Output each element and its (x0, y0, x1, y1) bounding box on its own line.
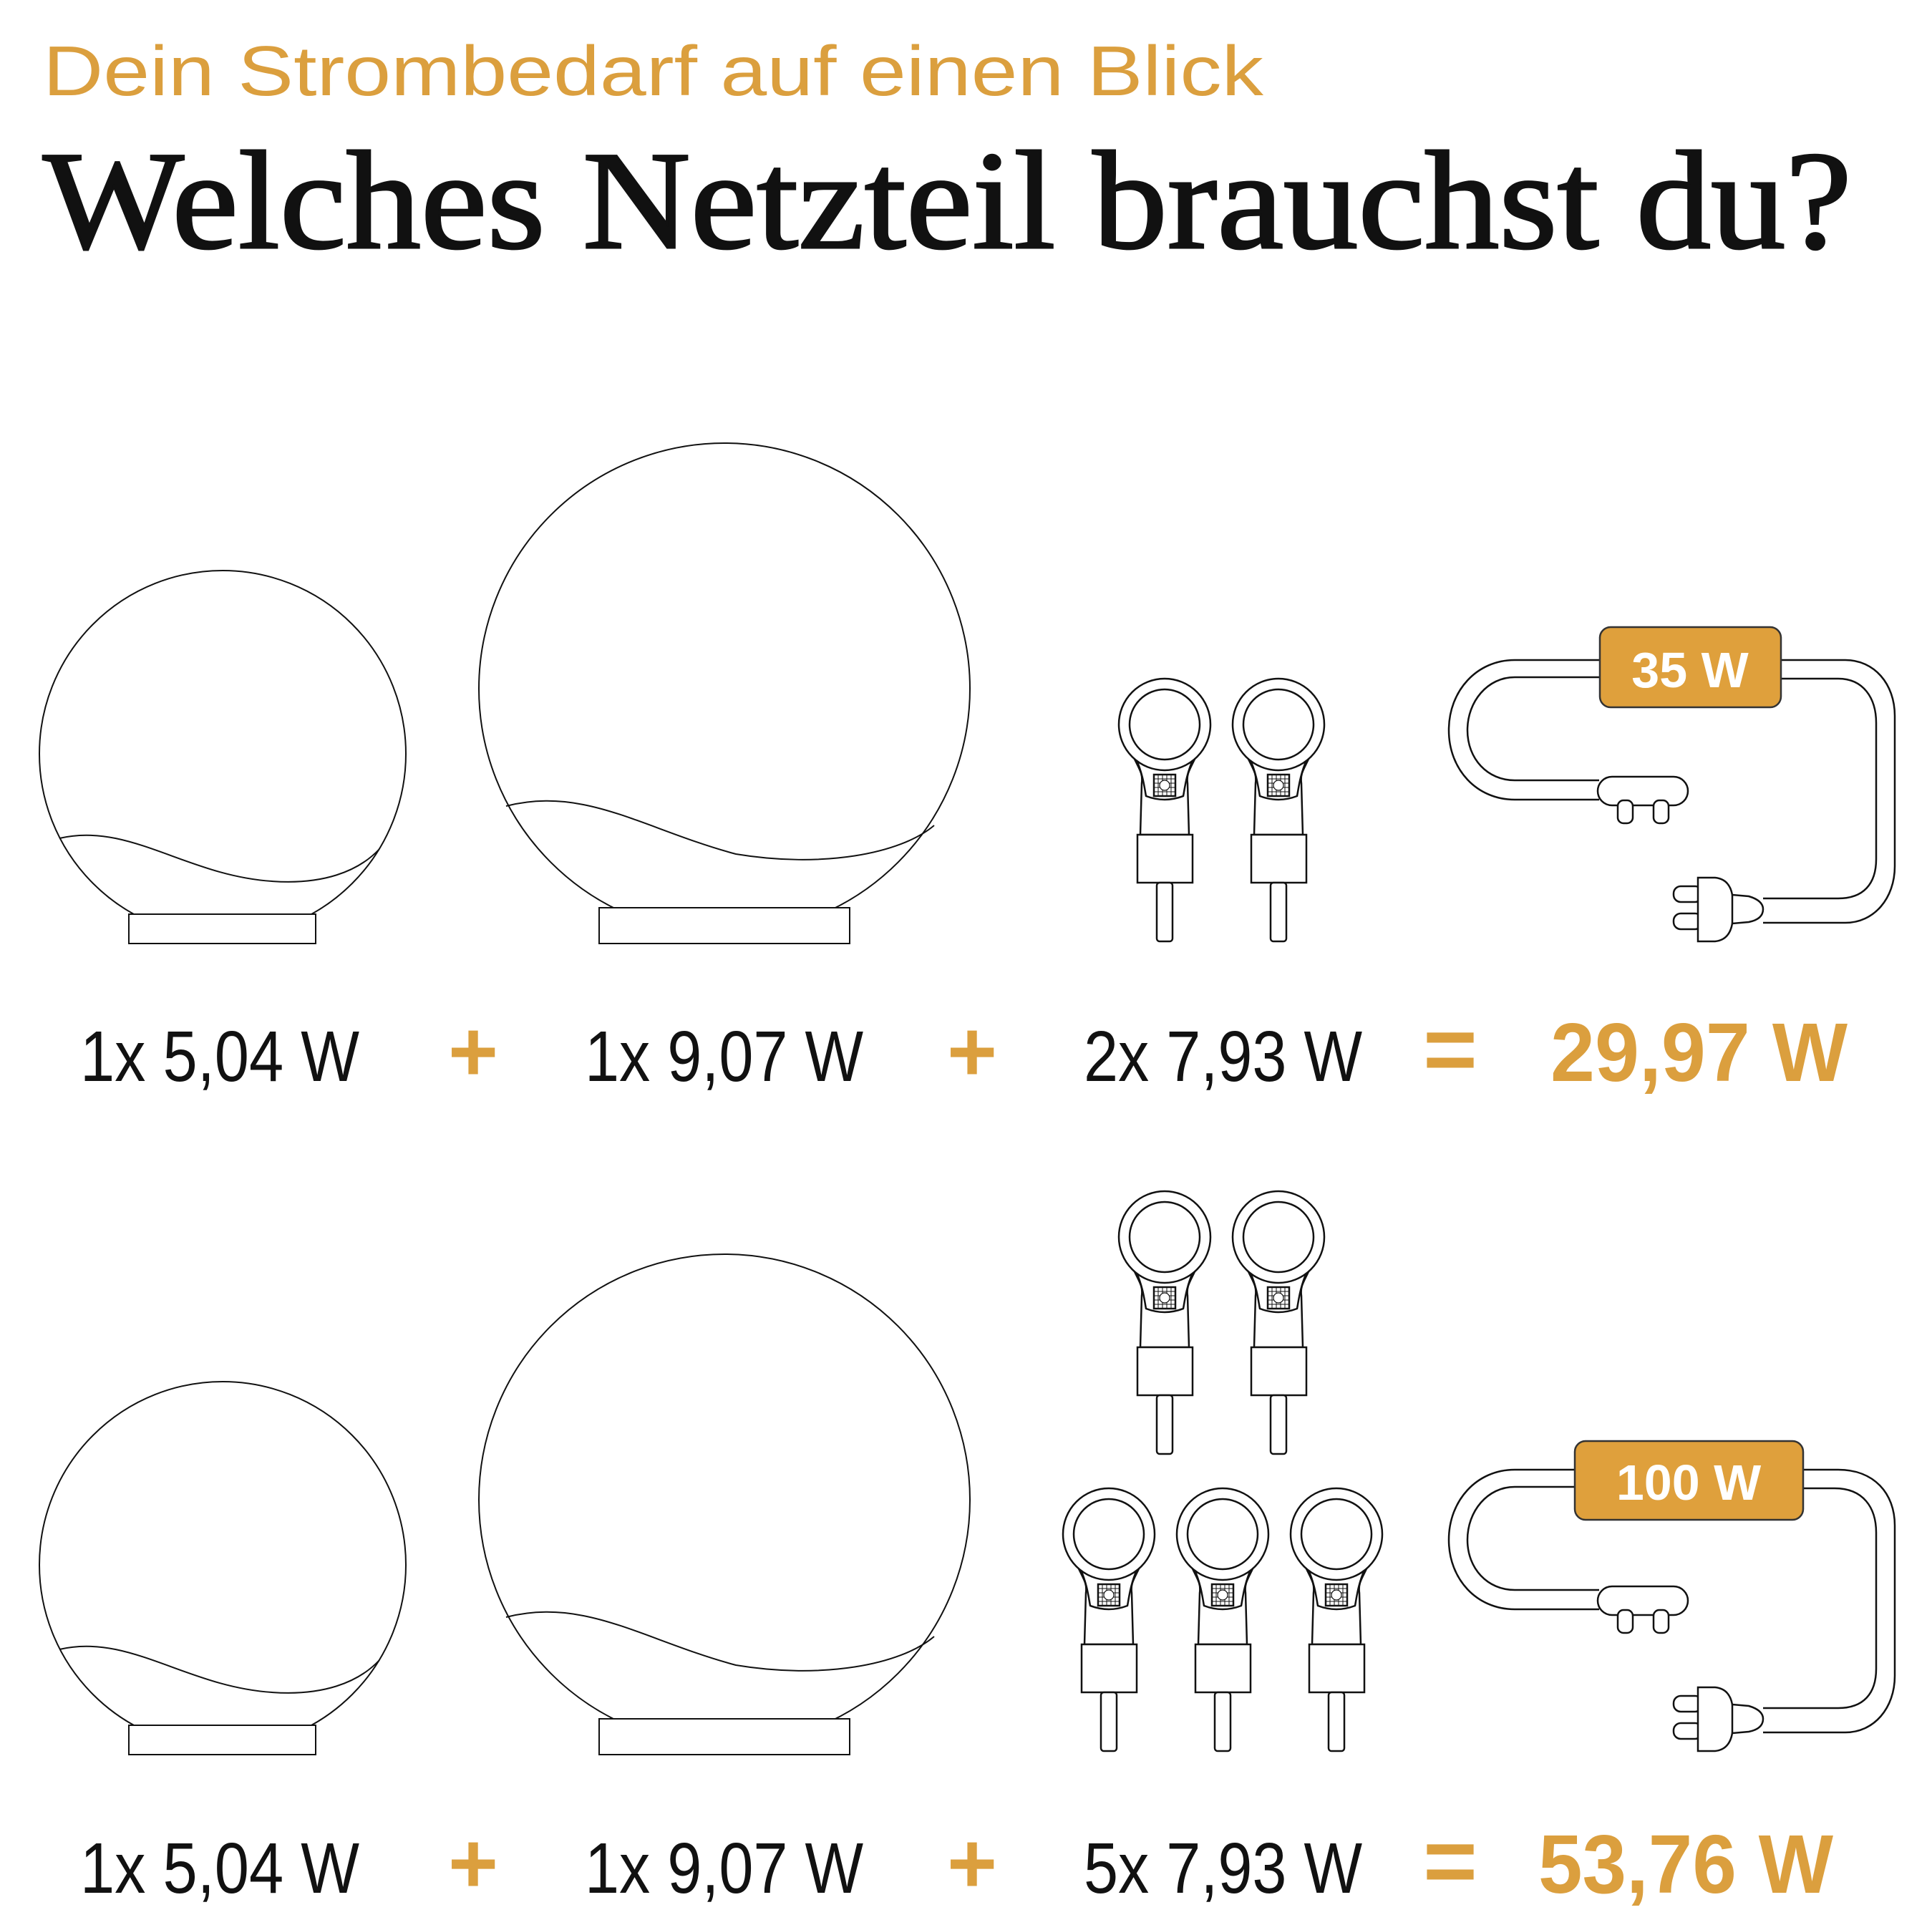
icon: large globe (479, 1254, 970, 1755)
icon: spotlights (1119, 679, 1324, 941)
equation row 1: = (1423, 996, 1477, 1101)
icon: large globe (479, 443, 970, 944)
equation row 1: 2x 7,93 W (1084, 1017, 1363, 1097)
equation row 2 (80, 1808, 1833, 1913)
equation row 2: 1x 9,07 W (585, 1828, 864, 1909)
equation row 1: + (947, 1004, 997, 1100)
equation row 1: + (448, 1004, 498, 1100)
equation row 2: = (1423, 1808, 1477, 1913)
equation row 1: 1x 9,07 W (585, 1017, 864, 1097)
icon: power supply 100 W: 100 W (1616, 1455, 1761, 1510)
equation row 2: + (448, 1815, 498, 1911)
equation row 2: 5x 7,93 W (1084, 1828, 1363, 1909)
equation row 2: 53,76 W (1538, 1818, 1833, 1911)
equation row 2: 1x 5,04 W (80, 1828, 360, 1909)
row 2 (39, 1191, 1895, 1755)
equation row 1: 29,97 W (1550, 1006, 1848, 1099)
icon: small globe (39, 1382, 406, 1755)
title: Welches Netzteil brauchst du? (43, 123, 1852, 278)
icon: power supply 35 W (1449, 627, 1895, 941)
row 1 (39, 443, 1895, 944)
subtitle: Dein Strombedarf auf einen Blick (43, 31, 1264, 110)
icon: power supply 35 W: 35 W (1631, 642, 1749, 698)
equation row 2: + (947, 1815, 997, 1911)
equation row 1: 1x 5,04 W (80, 1017, 360, 1097)
icon: power supply 100 W (1449, 1441, 1895, 1751)
icon: small globe (39, 571, 406, 944)
icon: spotlights (1063, 1191, 1382, 1751)
equation row 1 (80, 996, 1848, 1101)
